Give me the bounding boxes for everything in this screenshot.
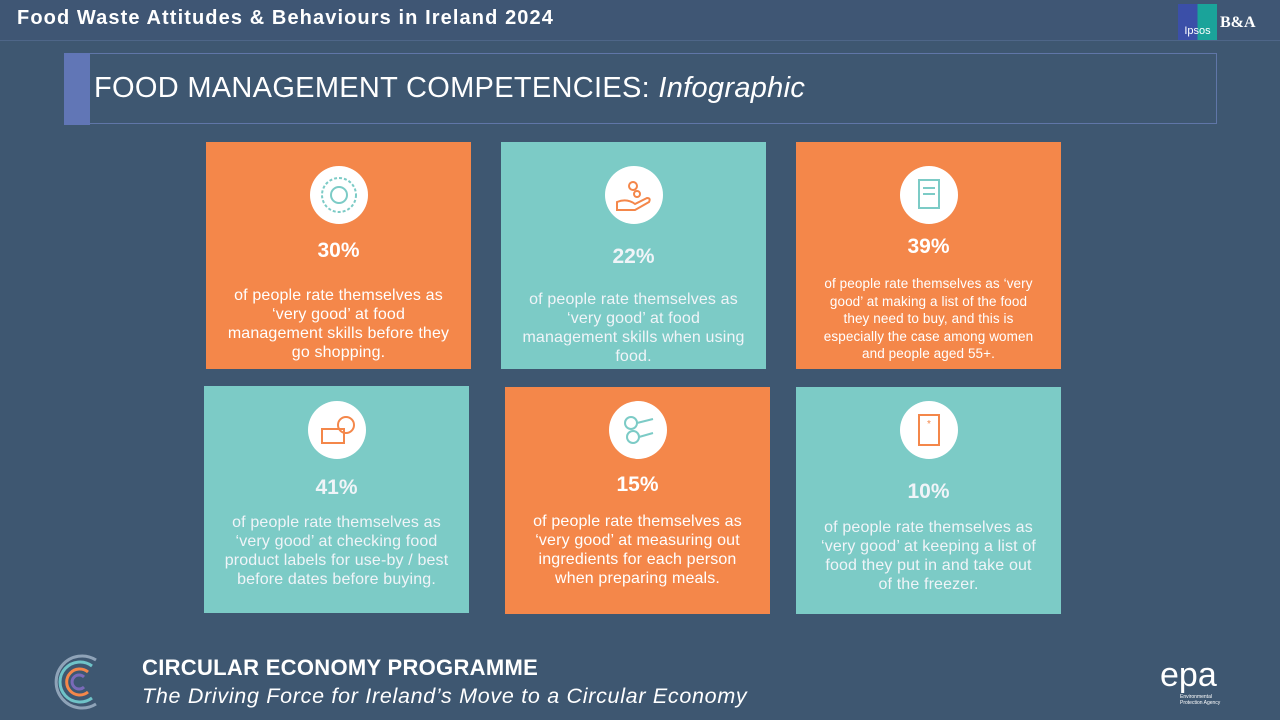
panel: 41%: of people rate themselves as (232, 514, 441, 531)
icon: freezer: * (927, 419, 931, 430)
panel: 41% (204, 386, 469, 613)
panel: 41%: before dates before buying. (237, 571, 436, 588)
panel: 15%: 15% (616, 473, 659, 496)
panel: 30%: ‘very good’ at food (272, 306, 405, 323)
panel: 15%: ‘very good’ at measuring out (535, 532, 740, 549)
logo: Ipsos B&A (1178, 4, 1256, 40)
panel: 10%: 10% (907, 480, 950, 503)
logo: Ipsos B&A: Ipsos (1184, 25, 1211, 37)
panel: 15%: when preparing meals. (555, 570, 720, 587)
panel: 22%: of people rate themselves as (529, 291, 738, 308)
panel: 22% (501, 142, 766, 369)
panel: 39%: of people rate themselves as ‘very (824, 276, 1033, 291)
logo: epa: Environmental Protection Agency (1180, 694, 1220, 706)
panel: 30%: 30% (317, 239, 360, 262)
panel: 10%: of the freezer. (878, 576, 979, 593)
icon: gear cycle (310, 166, 368, 224)
footer programme text (142, 655, 748, 708)
panel: 22%: ‘very good’ at food (567, 310, 700, 327)
header title: Food Waste Attitudes & Behaviours in Ireland 2024 (17, 7, 554, 29)
logo: epa: epa (1160, 656, 1217, 694)
panel: 39%: they need to buy, and this is (843, 311, 1014, 326)
panel: 10%: ‘very good’ at keeping a list of (821, 538, 1036, 555)
panel: 10% (796, 387, 1061, 614)
icon: freezer (900, 401, 958, 459)
panel: 41%: ‘very good’ at checking food (236, 533, 437, 550)
panel: 41%: 41% (315, 476, 358, 499)
section title (64, 53, 1217, 124)
panel: 30%: go shopping. (292, 344, 385, 361)
panel: 15%: of people rate themselves as (533, 513, 742, 530)
panel: 39%: and people aged 55+. (862, 346, 995, 361)
footer programme text: The Driving Force for Ireland’s Move to a Circular Economy (142, 684, 747, 708)
panel: 22%: food. (615, 348, 652, 365)
panel: 30% (206, 142, 471, 369)
icon: list scroll (900, 166, 958, 224)
panel: 30%: management skills before they (228, 325, 449, 342)
panel: 22%: 22% (612, 245, 655, 268)
icon: basket with clock (308, 401, 366, 459)
header bar (0, 0, 1280, 41)
panel: 10%: food they put in and take out (825, 557, 1032, 574)
footer programme text: CIRCULAR ECONOMY PROGRAMME (142, 655, 538, 680)
section title: FOOD MANAGEMENT COMPETENCIES: Infographic (94, 72, 805, 104)
panel: 10%: of people rate themselves as (824, 519, 1033, 536)
icon: hand with produce (604, 166, 662, 224)
panel: 41%: product labels for use-by / best (225, 552, 448, 569)
panel: 22%: management skills when using (522, 329, 745, 346)
icon: measuring spoons (608, 401, 666, 459)
icon: circular economy logo (54, 654, 97, 710)
logo: Ipsos B&A: B&A (1220, 14, 1256, 31)
panel: 39%: especially the case among women (824, 328, 1033, 344)
panel: 39%: 39% (907, 235, 950, 258)
panel: 39%: good’ at making a list of the food (830, 294, 1027, 308)
panel: 15% (505, 387, 770, 614)
panel: 39% (796, 142, 1061, 369)
panel: 15%: ingredients for each person (539, 551, 736, 568)
panel: 30%: of people rate themselves as (234, 287, 443, 304)
